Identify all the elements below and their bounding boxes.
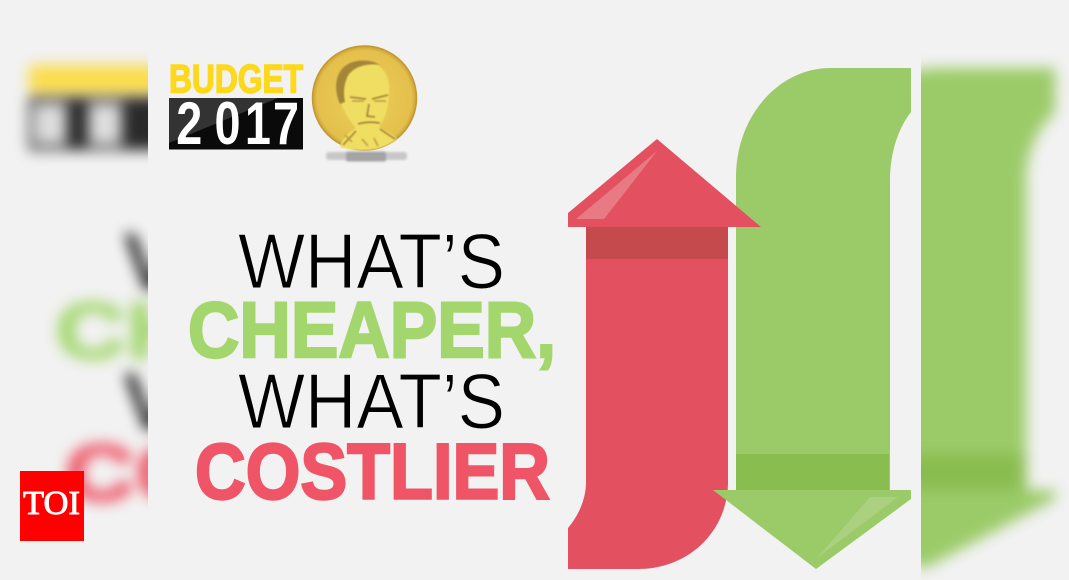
arrow: red shaft	[568, 227, 728, 569]
title	[188, 217, 556, 516]
green head highlight	[817, 497, 898, 558]
title line: WHAT'S: WHAT’S	[238, 217, 505, 305]
coin shadow	[326, 152, 407, 162]
arrow: green head	[713, 490, 911, 569]
red arrow shade band	[586, 227, 728, 259]
heading: BUDGET: BUDGET	[169, 58, 303, 102]
coin disc	[312, 46, 416, 150]
icon: gold coin with portrait	[312, 46, 416, 162]
year plate	[169, 98, 303, 150]
logo: TOI	[20, 471, 84, 541]
title line: COSTLIER: COSTLIER	[195, 426, 550, 516]
blurred stretched backdrop: COSTLIER	[65, 429, 556, 517]
arrows	[568, 68, 911, 569]
title line: CHEAPER: CHEAPER,	[188, 285, 556, 374]
blurred stretched backdrop: WHAT’S	[124, 218, 494, 306]
blurred stretched backdrop: CHEAPER,	[55, 287, 564, 375]
logo: TOI: TOI	[23, 485, 80, 522]
logo: Budget 2017	[169, 58, 303, 157]
title line: WHAT'S: WHAT’S	[238, 357, 505, 445]
arrow: red head	[568, 139, 761, 227]
portrait	[336, 61, 397, 150]
blurred stretched backdrop: WHAT’S	[124, 358, 494, 446]
arrow: green shaft	[736, 68, 911, 490]
green arrow shade band	[736, 454, 889, 490]
year: 2017: 2017	[176, 90, 299, 157]
red head highlight	[576, 151, 657, 219]
